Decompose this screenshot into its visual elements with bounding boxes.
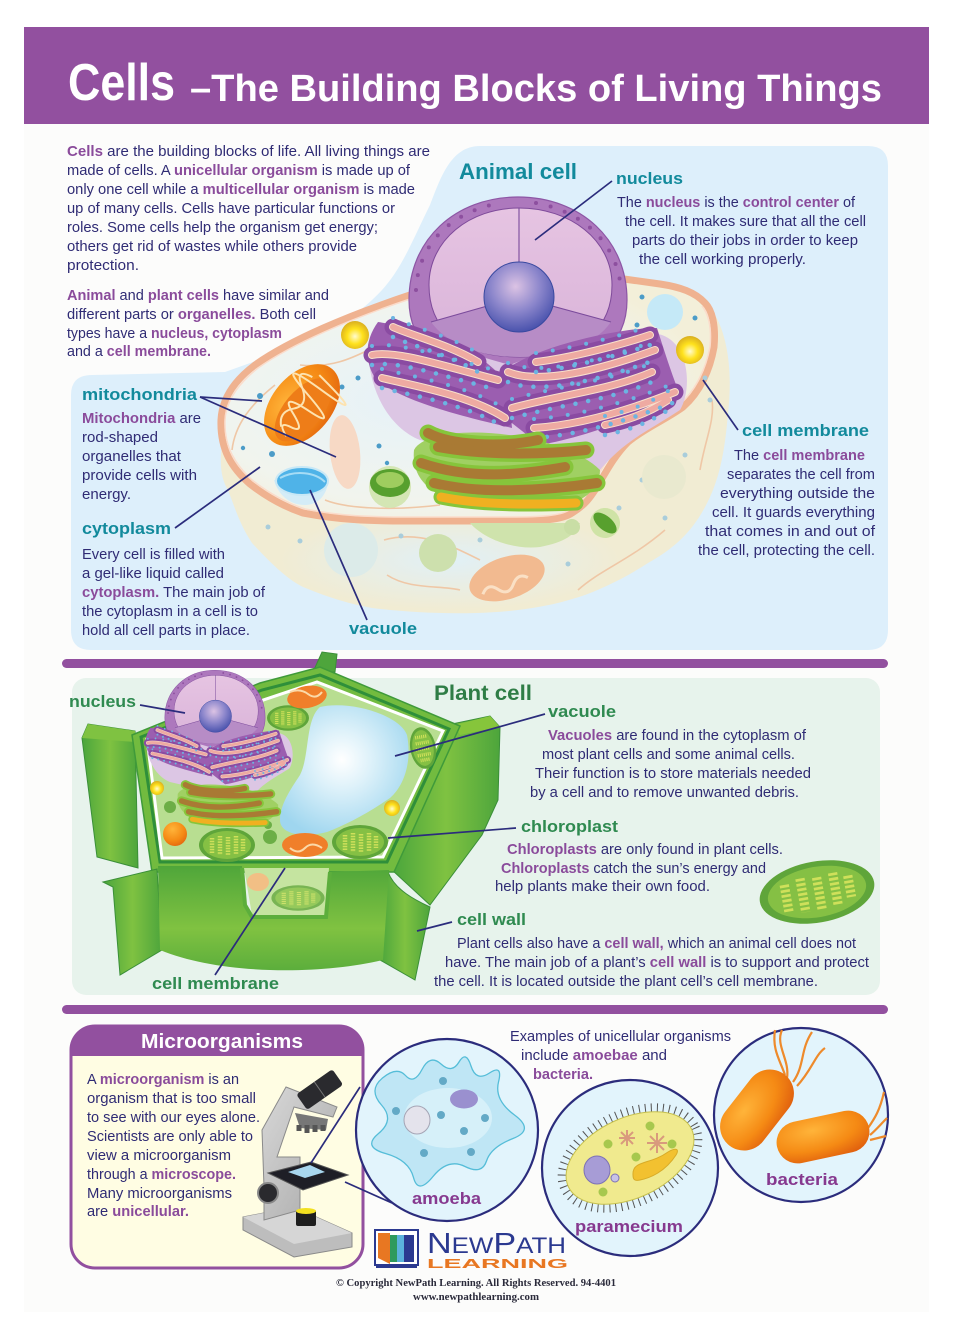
text block: cell membrane — [698, 447, 876, 559]
vacuole — [280, 705, 409, 835]
text block: vacuole: Their function is to store materials needed — [535, 765, 811, 782]
text block: cell membrane: the cell, protecting the cell. — [698, 542, 875, 559]
label: chloroplast — [388, 817, 618, 838]
panel: plant cell background — [72, 678, 880, 995]
heading: microorganisms: Microorganisms — [141, 1031, 303, 1053]
logo: NewPath Learning: NEWPATH — [427, 1228, 566, 1260]
footer: copyright: © Copyright NewPath Learning. All Rights Reserved. 94-4401 — [336, 1278, 616, 1289]
label: chloroplast: chloroplast — [521, 817, 618, 836]
text block: microorganism definition: organism that is too small — [87, 1090, 256, 1107]
text block: introduction: roles. Some cells help the organism get energy; — [67, 219, 378, 236]
text block: introduction: only one cell while a multicellular organism is made — [67, 181, 415, 198]
logo: NewPath Learning — [375, 1228, 568, 1271]
text block: nucleus — [617, 194, 866, 268]
text block: cell wall — [434, 935, 870, 990]
text block: cytoplasm: the cytoplasm in a cell is to — [82, 603, 258, 620]
text block: vacuole: most plant cells and some animal cells. — [542, 746, 795, 763]
text block: examples: Examples of unicellular organisms — [510, 1028, 731, 1045]
header banner — [24, 27, 929, 124]
label: cell wall: cell wall — [457, 910, 526, 929]
text block: nucleus: the cell working properly. — [639, 251, 806, 268]
outer cell body — [221, 290, 730, 613]
footer: copyright — [336, 1278, 616, 1303]
text block: mitochondria: energy. — [82, 486, 131, 503]
label: plant vacuole: vacuole — [548, 702, 616, 721]
text block: examples — [510, 1028, 731, 1083]
title: –The Building Blocks of Living Things — [190, 68, 882, 110]
label: plant cell membrane — [152, 868, 285, 993]
lower left flap — [103, 869, 162, 975]
label: vacuole: vacuole — [349, 619, 417, 638]
top ridge — [313, 652, 337, 672]
text block: chloroplast — [495, 841, 783, 895]
left wall flap — [82, 724, 138, 868]
panel: animal cell background — [71, 146, 888, 650]
outer mitochondrion — [463, 546, 551, 610]
text block: introduction: up of many cells. Cells have particular functions or — [67, 200, 395, 217]
text block: introduction: types have a nucleus, cytoplasm — [67, 325, 282, 342]
text block: introduction: protection. — [67, 257, 139, 274]
text block: microorganism definition: Scientists are only able to — [87, 1128, 253, 1145]
label: cell membrane — [703, 380, 869, 440]
illustration: plant cell — [82, 652, 500, 980]
text block: introduction: others get rid of wastes while others provide — [67, 238, 357, 255]
green blob below membrane — [470, 523, 580, 548]
outer vesicles — [324, 455, 686, 577]
text block: examples: include amoebae and — [521, 1047, 667, 1064]
small green organelle — [584, 502, 626, 544]
text block: nucleus: parts do their jobs in order to keep — [632, 232, 858, 249]
circle: bacteria — [710, 1028, 888, 1202]
label: paramecium: paramecium — [575, 1217, 683, 1236]
text block: microorganism definition: A microorganism is an — [87, 1071, 239, 1088]
lower right flap — [380, 872, 430, 980]
label: amoeba: amoeba — [412, 1189, 482, 1208]
label: cell membrane: cell membrane — [742, 421, 869, 440]
footer: copyright: www.newpathlearning.com — [413, 1292, 540, 1303]
text block: introduction: different parts or organelles. Both cell — [67, 306, 316, 323]
text block: nucleus: the cell. It makes sure that all the cell — [625, 213, 866, 230]
illustration: animal cell — [221, 197, 730, 613]
nucleus — [409, 197, 627, 375]
text block: cell wall: the cell. It is located outside the plant cell’s cell membrane. — [434, 973, 818, 990]
text block: cell wall: have. The main job of a plant’s cell wall is to support and protect — [445, 954, 870, 971]
label: bacteria: bacteria — [766, 1170, 839, 1189]
label: cytoplasm — [82, 467, 260, 538]
text block: chloroplast: Chloroplasts catch the sun’s energy and — [501, 860, 766, 877]
green organelle — [369, 466, 411, 508]
text block: microorganism definition — [87, 1071, 260, 1220]
wall notch — [242, 868, 330, 917]
text block: introduction: made of cells. A unicellular organism is made up of — [67, 162, 411, 179]
text block: mitochondria: rod-shaped — [82, 429, 158, 446]
text block: microorganism definition: are unicellular. — [87, 1203, 189, 1220]
mitochondrion: orange — [249, 350, 358, 462]
logo: NewPath Learning: LEARNING — [427, 1256, 568, 1271]
text block: vacuole — [530, 727, 811, 801]
text block: chloroplast: help plants make their own food. — [495, 878, 710, 895]
text block: chloroplast: Chloroplasts are only found in plant cells. — [507, 841, 783, 858]
label: mitochondria: mitochondria — [82, 385, 198, 404]
text block: cytoplasm: hold all cell parts in place. — [82, 622, 250, 639]
cell wall — [132, 667, 460, 872]
heading: plant cell: Plant cell — [434, 682, 532, 705]
text block: microorganism definition: view a microorganism — [87, 1147, 231, 1164]
yellow vesicles — [341, 321, 704, 364]
text block: microorganism definition: through a microscope. — [87, 1166, 236, 1183]
nucleus and reticulum — [146, 670, 293, 803]
panel header — [71, 1026, 363, 1056]
text block: introduction: Animal and plant cells have similar and — [67, 287, 329, 304]
text block: introduction: and a cell membrane. — [67, 343, 211, 360]
label: cytoplasm: cytoplasm — [82, 519, 171, 538]
text block: cytoplasm: a gel-like liquid called — [82, 565, 224, 582]
text block: cytoplasm: cytoplasm. The main job of — [82, 584, 266, 601]
text block: introduction — [67, 143, 430, 360]
label: vacuole — [310, 490, 417, 638]
text block: cell membrane: separates the cell from — [727, 466, 875, 483]
cell membrane — [221, 279, 715, 521]
label: mitochondria — [82, 385, 336, 457]
text block: cytoplasm: Every cell is filled with — [82, 546, 225, 563]
text block: microorganism definition: to see with our eyes alone. — [87, 1109, 260, 1126]
cell interior — [147, 682, 443, 858]
text block: microorganism definition: Many microorganisms — [87, 1185, 232, 1202]
title: Cells — [68, 54, 175, 112]
text block: mitochondria: Mitochondria are — [82, 410, 201, 427]
text block: nucleus: The nucleus is the control center of — [617, 194, 856, 211]
icon: chloroplast — [755, 852, 879, 932]
text block: mitochondria: provide cells with — [82, 467, 197, 484]
panel: microorganisms — [71, 1026, 363, 1268]
text block: cell membrane: everything outside the — [720, 485, 875, 502]
circle: amoeba — [356, 1039, 538, 1221]
pale blue vesicle — [647, 294, 683, 330]
cytoplasm dots — [241, 294, 698, 465]
icon: microscope — [243, 1069, 352, 1257]
heading: animal cell: Animal cell — [459, 159, 577, 184]
golgi stack — [178, 784, 278, 827]
organelles — [150, 683, 439, 862]
text block: mitochondria — [82, 410, 201, 503]
front wall — [158, 866, 389, 970]
golgi stack — [414, 433, 600, 511]
text block: examples: bacteria. — [533, 1066, 593, 1083]
mitochondrion: pale — [326, 414, 364, 490]
text block: cell membrane: that comes in and out of — [705, 523, 876, 540]
text block: cell wall: Plant cells also have a cell wall, which an animal cell does not — [457, 935, 857, 952]
text block: introduction: Cells are the building blocks of life. All living things are — [67, 143, 430, 160]
label: plant nucleus: nucleus — [69, 692, 136, 711]
label: nucleus — [535, 169, 683, 240]
label: plant vacuole — [395, 702, 616, 756]
text block: cell membrane: The cell membrane — [734, 447, 865, 464]
text block: vacuole: by a cell and to remove unwanted debris. — [530, 784, 799, 801]
label: nucleus: nucleus — [616, 169, 683, 188]
title — [68, 54, 882, 112]
cytoplasm fibres — [232, 345, 713, 590]
text block: vacuole: Vacuoles are found in the cytoplasm of — [548, 727, 807, 744]
magnifier lines — [311, 1087, 392, 1203]
endoplasmic reticulum — [367, 318, 687, 485]
right wall flap — [392, 716, 500, 905]
text block: cytoplasm — [82, 546, 266, 639]
label: plant nucleus — [69, 692, 185, 713]
label: cell wall — [417, 910, 526, 931]
circle: paramecium — [542, 1080, 718, 1256]
text block: mitochondria: organelles that — [82, 448, 182, 465]
vacuole — [274, 467, 328, 505]
text block: cell membrane: cell. It guards everything — [712, 504, 875, 521]
label: plant cell membrane: cell membrane — [152, 974, 279, 993]
